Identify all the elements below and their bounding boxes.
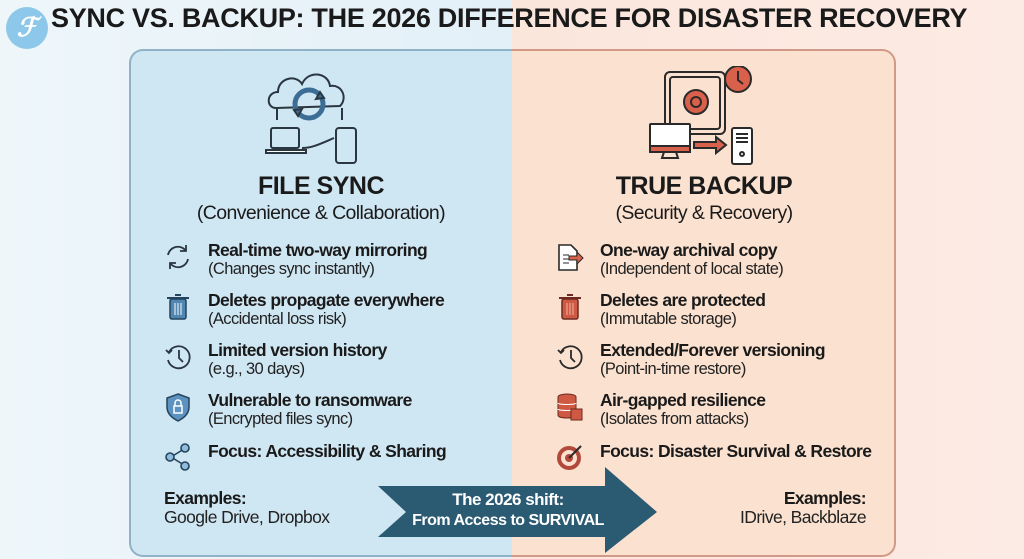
list: backup features: Deletes are protected [600,290,765,310]
item: focus survival [557,441,872,470]
heading: true backup [615,172,793,224]
logo [6,7,48,49]
item: ransomware [166,390,412,428]
list: sync features: (Changes sync instantly) [208,260,374,278]
list: backup features: (Isolates from attacks) [600,410,748,428]
list: sync features: (Accidental loss risk) [208,310,346,328]
list: backup features: (Independent of local state) [600,260,783,278]
heading: file sync [197,172,445,224]
examples: sync: Google Drive, Dropbox [164,507,329,527]
examples: backup: Examples: [784,488,866,508]
heading: true backup: TRUE BACKUP [616,172,792,200]
arrow: the 2026 shift [378,467,657,553]
list: sync features: Real-time two-way mirroring [208,240,427,260]
list: backup features: One-way archival copy [600,240,777,260]
item: deletes protected [559,290,765,328]
item: air-gapped [558,390,766,428]
list: sync features [165,240,446,471]
list: sync features: (Encrypted files sync) [208,410,353,428]
list: backup features [557,240,872,470]
examples: sync: Examples: [164,488,246,508]
icon: cloud sync devices [265,74,357,164]
list: backup features: (Immutable storage) [600,310,736,328]
logo: ℱ [17,13,37,42]
panel: file sync [129,49,513,557]
list: sync features: Focus: Accessibility & Sharing [208,441,446,461]
list: backup features: Focus: Disaster Survival & Restore [600,441,871,461]
examples: sync [164,488,330,527]
item: mirroring [167,240,427,278]
item: archival copy [558,240,783,278]
arrow: the 2026 shift: The 2026 shift: [452,490,564,509]
list: sync features: Limited version history [208,340,387,360]
list: backup features: Extended/Forever versioning [600,340,825,360]
title: SYNC VS. BACKUP: THE 2026 DIFFERENCE FOR DISASTER RECOVERY [51,3,967,33]
item: focus [165,441,446,471]
icon: safe backup [649,66,753,165]
heading: file sync: (Convenience & Collaboration) [197,202,445,224]
list: backup features: Air-gapped resilience [600,390,765,410]
heading: true backup: (Security & Recovery) [615,202,793,224]
examples: backup: IDrive, Backblaze [740,507,866,527]
list: sync features: Deletes propagate everywhere [208,290,444,310]
heading: file sync: FILE SYNC [258,172,384,200]
list: sync features: Vulnerable to ransomware [208,390,412,410]
item: deletes [167,290,444,328]
item: version history [165,340,388,378]
panel: true backup [512,49,896,557]
list: sync features: (e.g., 30 days) [208,360,304,378]
examples: backup [740,488,866,527]
list: backup features: (Point-in-time restore) [600,360,746,378]
item: versioning [557,340,825,378]
arrow: the 2026 shift: From Access to SURVIVAL [412,512,604,529]
